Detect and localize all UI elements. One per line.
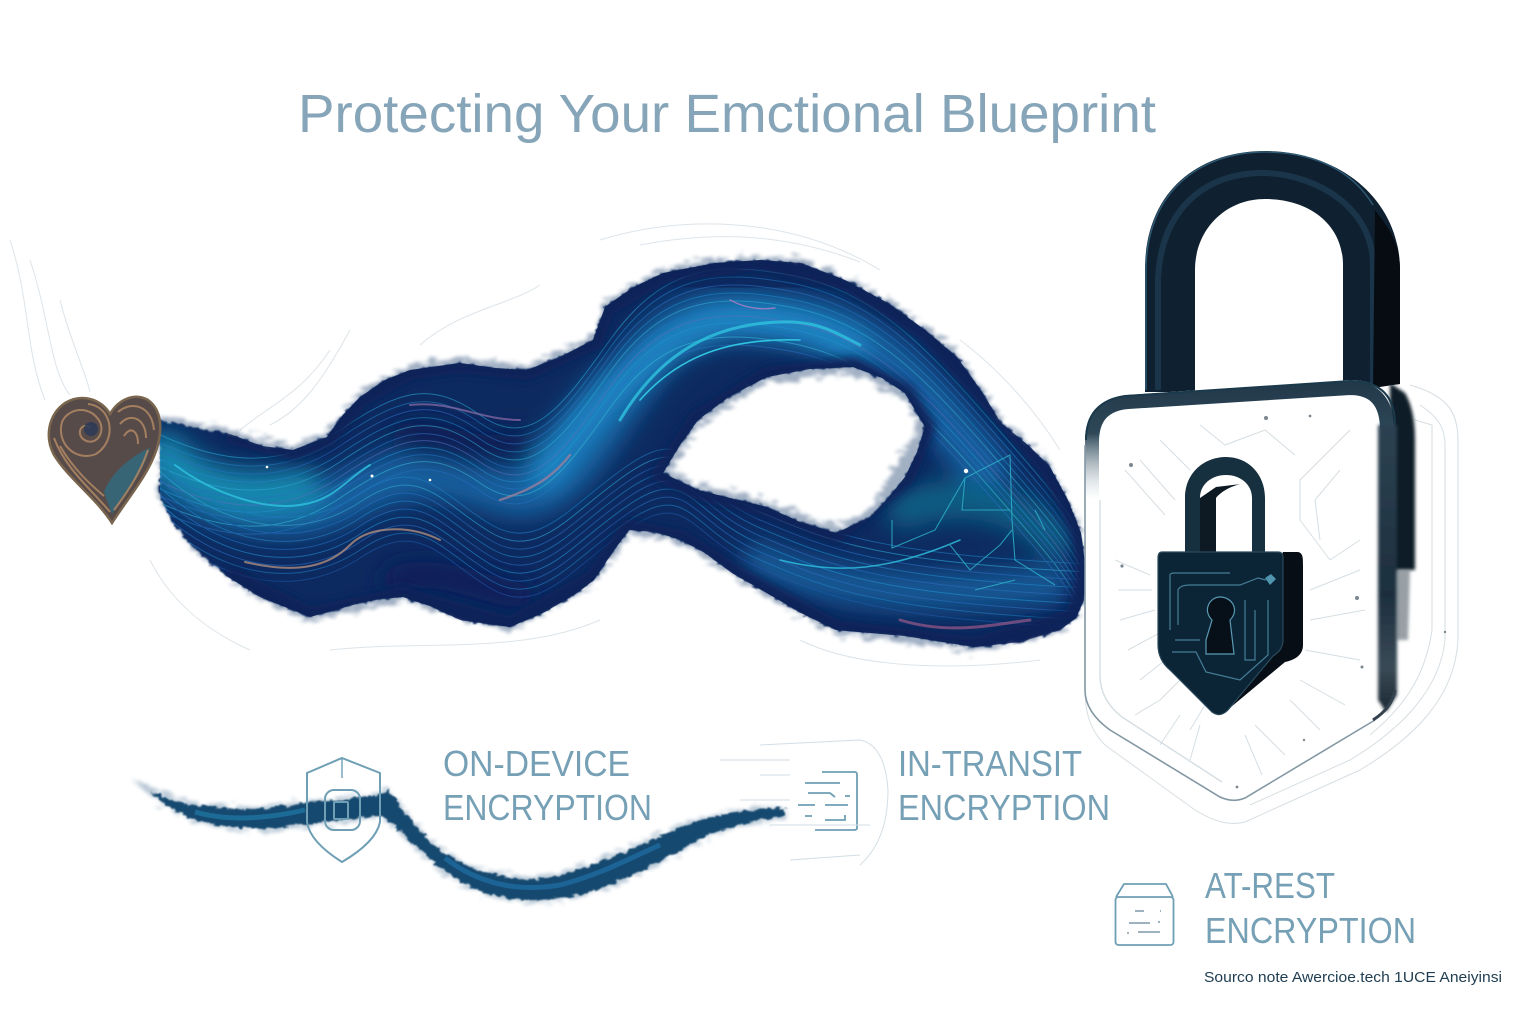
faint wisps around the heart and stream bbox=[10, 224, 1060, 666]
network lines bbox=[892, 455, 1055, 590]
icon: document lines bbox=[798, 772, 857, 830]
stream fuzzy halo bbox=[160, 258, 1088, 651]
icon: storage box bbox=[1116, 884, 1174, 945]
circuit trace lines bbox=[1115, 425, 1365, 775]
padlock ghost outlines bbox=[1085, 385, 1458, 824]
inner lock icon bbox=[1158, 457, 1303, 715]
padlock body bbox=[1085, 380, 1415, 800]
label: at-rest: ENCRYPTION bbox=[1205, 910, 1416, 951]
padlock shackle bbox=[1145, 151, 1400, 392]
strands bbox=[150, 269, 1090, 628]
title: Protecting Your Emctional Blueprint bbox=[298, 84, 1156, 144]
bright cyan highlights bbox=[175, 322, 960, 568]
lower stream halo bbox=[130, 778, 785, 902]
dark rim inside the stream edge bbox=[225, 260, 1086, 647]
specks bbox=[1120, 415, 1446, 788]
icon: shield bbox=[307, 758, 380, 862]
label: on-device: ENCRYPTION bbox=[443, 787, 652, 828]
stream fuzzy base bbox=[160, 260, 1086, 647]
warm iridescent threads bbox=[245, 300, 1030, 628]
colour bands bbox=[165, 316, 1055, 596]
label: on-device bbox=[443, 743, 652, 828]
in-transit encryption item bbox=[720, 740, 1110, 865]
padlock bbox=[1085, 151, 1458, 824]
label: at-rest: AT-REST bbox=[1205, 865, 1335, 906]
icon: heart bbox=[49, 397, 160, 523]
source note: Sourco note Awercioe.tech 1UCE Aneiyinsi bbox=[1204, 970, 1502, 986]
on-device encryption item bbox=[307, 743, 652, 862]
label: in-transit: IN-TRANSIT bbox=[898, 743, 1082, 784]
label: at-rest bbox=[1205, 865, 1416, 951]
label: on-device: ON-DEVICE bbox=[443, 743, 630, 784]
label: in-transit: ENCRYPTION bbox=[898, 787, 1110, 828]
label: in-transit bbox=[898, 743, 1110, 828]
stream interior with strands bbox=[150, 260, 1090, 647]
at-rest encryption item bbox=[1116, 865, 1416, 951]
ghost motion lines bbox=[720, 740, 888, 865]
stream of data flowing from heart to lock bbox=[150, 258, 1090, 651]
lower stream body bbox=[150, 790, 785, 900]
lower stream bbox=[130, 778, 785, 902]
